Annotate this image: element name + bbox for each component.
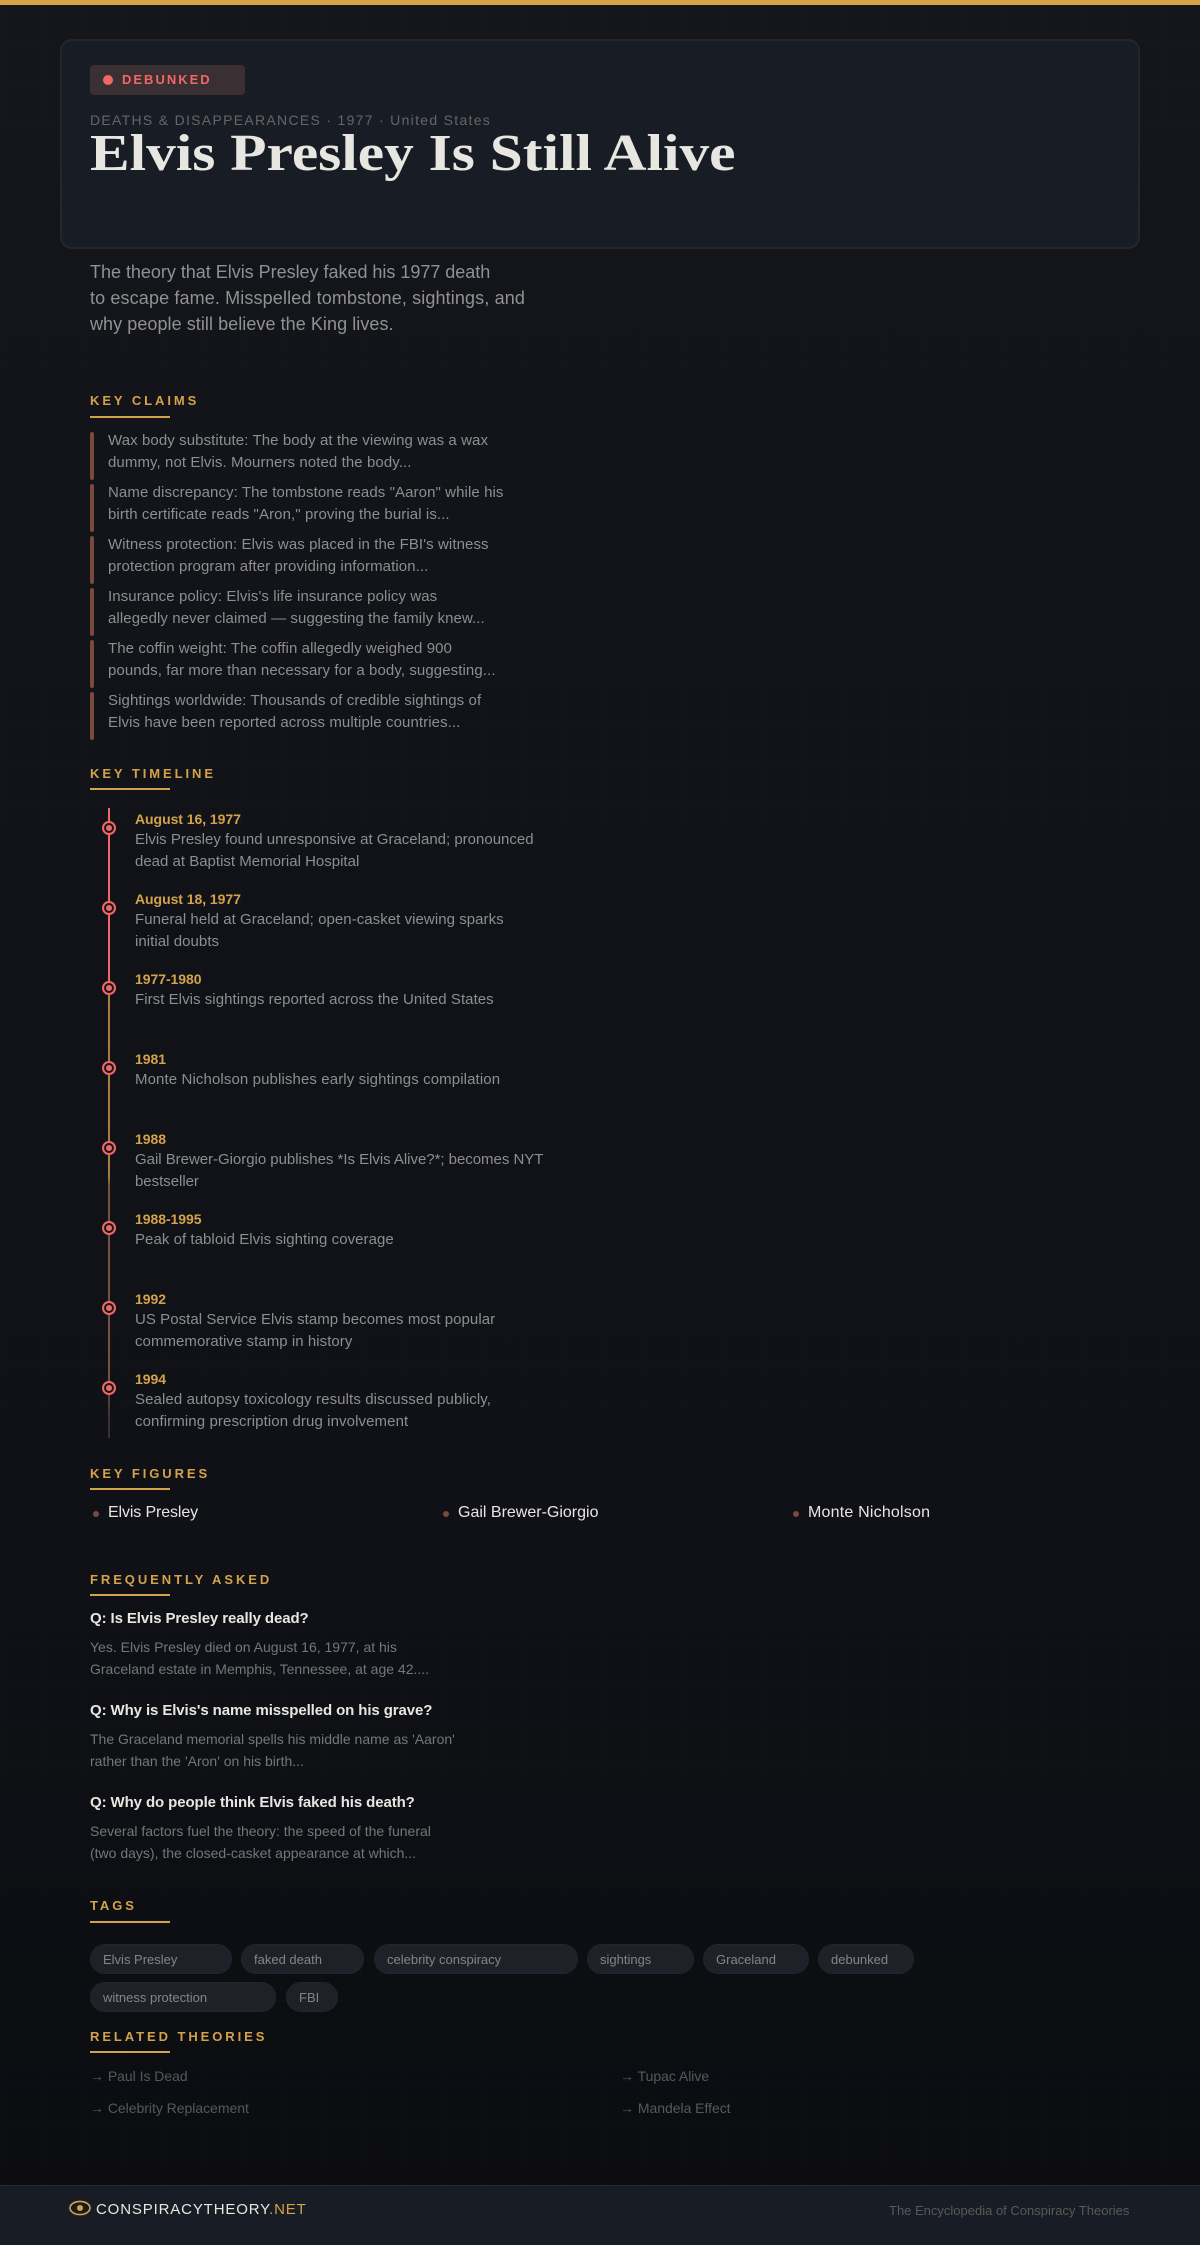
timeline item 6: 1988-1995 xyxy=(135,1211,202,1227)
footer xyxy=(0,2185,1200,2245)
timeline item 5: 1988 xyxy=(135,1131,166,1147)
claim: coffin weight: The coffin weight: The coffin allegedly weighed 900 xyxy=(108,640,452,657)
claim: wax body: Wax body substitute: The body at the viewing was a wax xyxy=(108,432,488,449)
claim: name discrepancy xyxy=(90,484,504,532)
timeline item 3: 1977-1980 xyxy=(135,971,202,987)
tag: sightings xyxy=(600,1952,651,1967)
timeline spine xyxy=(108,808,110,1438)
heading: tags: TAGS xyxy=(90,1898,137,1913)
related link: → Mandela Effect xyxy=(620,2100,731,2116)
heading: key claims: KEY CLAIMS xyxy=(90,393,199,408)
claim: insurance policy: Insurance policy: Elvis's life insurance policy was xyxy=(108,588,437,605)
tag xyxy=(703,1944,809,1974)
timeline item 2: initial doubts xyxy=(135,933,219,950)
panel: frequently asked xyxy=(90,1572,455,1861)
panel: related theories xyxy=(90,2029,731,2116)
timeline item 2: Funeral held at Graceland; open-casket viewing sparks xyxy=(135,911,504,928)
timeline item 1: dead at Baptist Memorial Hospital xyxy=(135,853,359,870)
faq 1: Q: Is Elvis Presley really dead? xyxy=(90,1610,309,1627)
claim: wax body xyxy=(90,432,488,480)
timeline item 4 xyxy=(102,1051,500,1088)
category and year line: DEATHS & DISAPPEARANCES · 1977 · United States xyxy=(90,112,491,128)
related link: → Paul Is Dead xyxy=(90,2068,188,2084)
timeline item 2: August 18, 1977 xyxy=(135,891,241,907)
tag xyxy=(241,1944,364,1974)
timeline item 2 xyxy=(102,891,504,950)
tag xyxy=(374,1944,578,1974)
panel: key claims xyxy=(90,393,504,740)
tag xyxy=(90,1944,232,1974)
claim: sightings xyxy=(90,692,482,740)
claim: sightings: Sightings worldwide: Thousands of credible sightings of xyxy=(108,692,481,709)
tagline: The Encyclopedia of Conspiracy Theories xyxy=(889,2203,1129,2218)
timeline item 5: bestseller xyxy=(135,1173,199,1190)
timeline item 5 xyxy=(102,1131,544,1190)
faq 2: Q: Why is Elvis's name misspelled on his grave? xyxy=(90,1702,432,1719)
claim: coffin weight: pounds, far more than necessary for a body, suggesting... xyxy=(108,662,496,679)
claim: witness protection: Witness protection: Elvis was placed in the FBI's witness xyxy=(108,536,489,553)
claim: witness protection xyxy=(90,536,489,584)
claim: wax body: dummy, not Elvis. Mourners noted the body... xyxy=(108,454,412,471)
faq 3: Several factors fuel the theory: the speed of the funeral xyxy=(90,1823,431,1839)
timeline item 7: commemorative stamp in history xyxy=(135,1333,352,1350)
timeline item 7 xyxy=(102,1291,495,1350)
related link: → Tupac Alive xyxy=(620,2068,709,2084)
faq 3: (two days), the closed-casket appearance at which... xyxy=(90,1845,416,1861)
icon: status dot xyxy=(103,75,113,85)
tag xyxy=(587,1944,694,1974)
claim: sightings: Elvis have been reported across multiple countries... xyxy=(108,714,460,731)
intro text xyxy=(90,262,525,334)
claim: name discrepancy: birth certificate reads "Aron," proving the burial is... xyxy=(108,506,450,523)
tag xyxy=(90,1982,276,2012)
timeline item 4: 1981 xyxy=(135,1051,166,1067)
timeline item 4: Monte Nicholson publishes early sightings compilation xyxy=(135,1071,500,1088)
related link: → Celebrity Replacement xyxy=(90,2100,249,2116)
claim: coffin weight xyxy=(90,640,496,688)
timeline item 8 xyxy=(102,1371,491,1430)
faq 3 xyxy=(90,1794,431,1861)
panel: key timeline xyxy=(90,766,544,1438)
tag: Elvis Presley xyxy=(103,1952,177,1967)
top accent bar xyxy=(0,0,1200,5)
timeline item 1: Elvis Presley found unresponsive at Graceland; pronounced xyxy=(135,831,534,848)
claim: name discrepancy: Name discrepancy: The tombstone reads "Aaron" while his xyxy=(108,484,504,501)
timeline item 1: August 16, 1977 xyxy=(135,811,241,827)
faq 1: Graceland estate in Memphis, Tennessee, at age 42.... xyxy=(90,1661,429,1677)
title: Elvis Presley Is Still Alive xyxy=(90,125,736,182)
intro text: why people still believe the King lives. xyxy=(90,314,394,334)
tag: witness protection xyxy=(103,1990,207,2005)
figure: Elvis Presley: Elvis Presley xyxy=(108,1504,198,1521)
tag xyxy=(818,1944,914,1974)
heading: key figures: KEY FIGURES xyxy=(90,1466,210,1481)
timeline item 1 xyxy=(102,811,534,870)
timeline item 8: confirming prescription drug involvement xyxy=(135,1413,408,1430)
timeline item 5: Gail Brewer-Giorgio publishes *Is Elvis Alive?*; becomes NYT xyxy=(135,1151,543,1168)
figure: Monte Nicholson: Monte Nicholson xyxy=(808,1504,930,1521)
tag: FBI xyxy=(299,1990,319,2005)
panel: key figures xyxy=(90,1466,930,1521)
icon: eye logo xyxy=(69,2200,91,2216)
faq 1 xyxy=(90,1610,429,1677)
brand name: CONSPIRACYTHEORY.NET xyxy=(96,2201,307,2218)
badge: debunked xyxy=(90,65,245,95)
heading: key timeline: KEY TIMELINE xyxy=(90,766,216,781)
timeline item 6: Peak of tabloid Elvis sighting coverage xyxy=(135,1231,394,1248)
faq 2: rather than the 'Aron' on his birth... xyxy=(90,1753,304,1769)
tag: Graceland xyxy=(716,1952,776,1967)
faq 3: Q: Why do people think Elvis faked his death? xyxy=(90,1794,415,1811)
intro text: The theory that Elvis Presley faked his 1977 death xyxy=(90,262,490,282)
heading: frequently asked: FREQUENTLY ASKED xyxy=(90,1572,272,1587)
tag: celebrity conspiracy xyxy=(387,1952,501,1967)
tag: faked death xyxy=(254,1952,322,1967)
timeline item 7: US Postal Service Elvis stamp becomes most popular xyxy=(135,1311,495,1328)
claim: insurance policy: allegedly never claimed — suggesting the family knew... xyxy=(108,610,485,627)
faq 1: Yes. Elvis Presley died on August 16, 1977, at his xyxy=(90,1639,397,1655)
timeline item 3 xyxy=(102,971,494,1008)
tag: debunked xyxy=(831,1952,888,1967)
timeline item 8: 1994 xyxy=(135,1371,166,1387)
badge label: DEBUNKED xyxy=(122,72,212,87)
intro text: to escape fame. Misspelled tombstone, sightings, and xyxy=(90,288,525,308)
heading: related theories: RELATED THEORIES xyxy=(90,2029,267,2044)
timeline item 7: 1992 xyxy=(135,1291,166,1307)
faq 2 xyxy=(90,1702,455,1769)
timeline item 3: First Elvis sightings reported across the United States xyxy=(135,991,494,1008)
faq 2: The Graceland memorial spells his middle name as 'Aaron' xyxy=(90,1731,455,1747)
timeline item 6 xyxy=(102,1211,394,1248)
panel: tags xyxy=(90,1898,914,2012)
claim: insurance policy xyxy=(90,588,485,636)
panel: header card xyxy=(60,39,1140,249)
tag xyxy=(286,1982,338,2012)
claim: witness protection: protection program after providing information... xyxy=(108,558,428,575)
figure: Gail Brewer-Giorgio: Gail Brewer-Giorgio xyxy=(458,1504,598,1521)
timeline item 8: Sealed autopsy toxicology results discussed publicly, xyxy=(135,1391,491,1408)
